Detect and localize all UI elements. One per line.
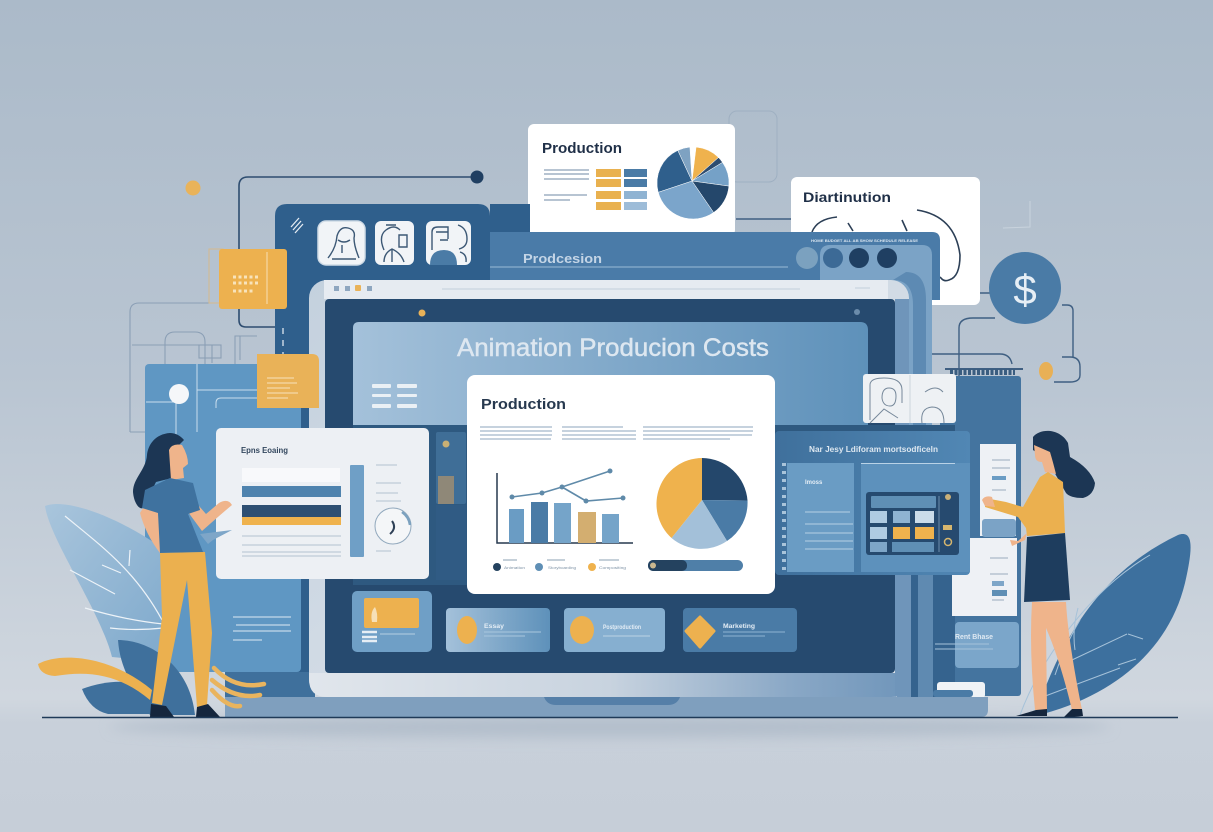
pale blocks: [242, 468, 340, 482]
fronds: yellow right: [212, 668, 264, 706]
title: Animation Producion Costs: [457, 334, 769, 362]
ground line: [42, 716, 1178, 718]
connector lines: right: [736, 219, 1080, 382]
bottom card 3: [564, 608, 665, 652]
faint arrow glyph: [1003, 201, 1030, 228]
vertical bar: [350, 465, 364, 557]
legend: Compositing: [599, 565, 626, 570]
bottom card 1: [352, 591, 432, 652]
pants: left woman: [152, 552, 212, 707]
head and neck: [169, 445, 188, 480]
right column: [861, 463, 970, 572]
shirt: left woman: [142, 478, 203, 553]
leaf: left small dark: [118, 640, 195, 715]
list lines: [242, 465, 401, 556]
person: right woman: [982, 431, 1095, 718]
heading: right panel: Nar Jesy Ldiforam mortsodficeln: [809, 444, 938, 454]
arm: left woman: [188, 501, 232, 531]
sweater: right woman: [985, 472, 1065, 536]
orange node: [1039, 362, 1053, 380]
orange dot: [186, 180, 200, 196]
bar and line chart: [497, 468, 633, 543]
panel: production header: [490, 232, 940, 300]
shoes: left woman: [150, 704, 220, 717]
monitor stand notch: [544, 697, 680, 705]
card grid lines: [146, 364, 271, 442]
monitor top bar: [324, 280, 888, 299]
thumbnail: character 1: [318, 221, 365, 265]
leaf: right: [1020, 534, 1191, 716]
head: right woman: [1034, 445, 1056, 474]
dashed marks: [282, 328, 284, 358]
toolbar circle: [796, 247, 818, 269]
leaf: left light: [45, 504, 166, 662]
hair: left woman: [133, 433, 184, 508]
card: top production: [528, 124, 735, 236]
dial icon: [375, 508, 411, 544]
panel: right: [775, 425, 970, 575]
floor shadow: [110, 716, 1110, 738]
bottom card 4: Marketing: [723, 624, 755, 630]
screen dots: [418, 310, 426, 316]
skirt: right woman: [1024, 533, 1070, 602]
card text lines: [233, 617, 291, 640]
connector network: left: [130, 303, 257, 432]
panel: left blue card: [145, 364, 315, 698]
hero list icon: [372, 384, 417, 408]
fronds: yellow left: [38, 658, 152, 700]
text columns: [480, 427, 753, 439]
pie chart: main production: [656, 458, 748, 549]
person: left woman: [133, 433, 232, 717]
back panel: right column: [940, 376, 1021, 696]
base of monitor: [225, 697, 988, 717]
screen mid panels: [353, 425, 868, 585]
side comb: [782, 463, 786, 570]
card: main production: [467, 375, 775, 594]
curved flow arrows: [812, 210, 960, 281]
hero panel: [353, 322, 868, 430]
thumbnail: character 2: [375, 221, 414, 265]
monitor support columns: [897, 575, 985, 698]
mini dashboard: [866, 492, 959, 555]
sticky note: orange top: [209, 249, 287, 309]
legs: right woman: [1031, 602, 1082, 710]
menu glyph: [291, 218, 303, 233]
shoes: right woman: [1016, 709, 1083, 718]
text lines: top production: [544, 170, 589, 200]
left column: Imoss: [805, 480, 823, 486]
dollar badge: $: [1013, 266, 1037, 313]
lower right dark block: [909, 575, 955, 697]
right stack: papers: [935, 444, 1019, 668]
table: top production: [596, 169, 647, 210]
bottom card 4: [683, 608, 797, 652]
monitor bottom bezel: [309, 673, 909, 697]
legend: Animation: [504, 565, 525, 570]
left column: [787, 463, 854, 572]
card: distribution: [791, 177, 980, 305]
hair: right woman: [1033, 431, 1095, 498]
connector line with node: [239, 170, 484, 327]
progress bar: [648, 560, 743, 571]
thumbnail: character 3: [426, 221, 471, 265]
stacked bars: [242, 486, 341, 525]
lower stat card: [955, 622, 1019, 668]
heading: main production: Production: [481, 397, 566, 413]
heading: top production: Production: [542, 141, 622, 157]
dollar badge: [989, 252, 1061, 324]
right stack: papers: Rent Bhase: [955, 634, 993, 641]
small toolbar text: HOME BUDGET ALL AB SHOW SCHEDULE RELEASE: [811, 238, 918, 243]
pie chart: top production: [657, 147, 729, 219]
clock icon: [169, 384, 189, 404]
document: left card: [216, 428, 429, 579]
back panel: left dark: [275, 204, 530, 690]
sticky dots: [233, 277, 259, 291]
monitor frame: [309, 280, 909, 697]
panel shadow top: [775, 425, 955, 431]
monitor screen: [325, 299, 895, 673]
legend: [493, 560, 626, 571]
comb strip: [950, 369, 1015, 375]
faint decorative outline card: [729, 111, 777, 182]
hand: [982, 496, 1027, 546]
monitor: [309, 280, 909, 697]
bottom card 3: Postproduction: [603, 625, 641, 631]
folder in hand: [200, 530, 232, 544]
heading: left card: Epns Eoaing: [241, 446, 288, 455]
bottom dark band: [225, 672, 315, 698]
heading: distribution: Diartinution: [803, 189, 891, 205]
bottom card 2: Essay: [484, 624, 505, 630]
side tabs behind monitor: [820, 245, 932, 640]
header underline: [490, 266, 788, 268]
sketch card: [863, 374, 956, 423]
heading: production header: Prodcesion: [523, 251, 602, 266]
leaf: bottom dark: [82, 682, 152, 714]
legend: Storyboarding: [548, 565, 576, 570]
sticky note: orange lower: [257, 354, 319, 408]
monitor right bezel: [891, 299, 909, 697]
bottom card 2: [446, 608, 550, 652]
